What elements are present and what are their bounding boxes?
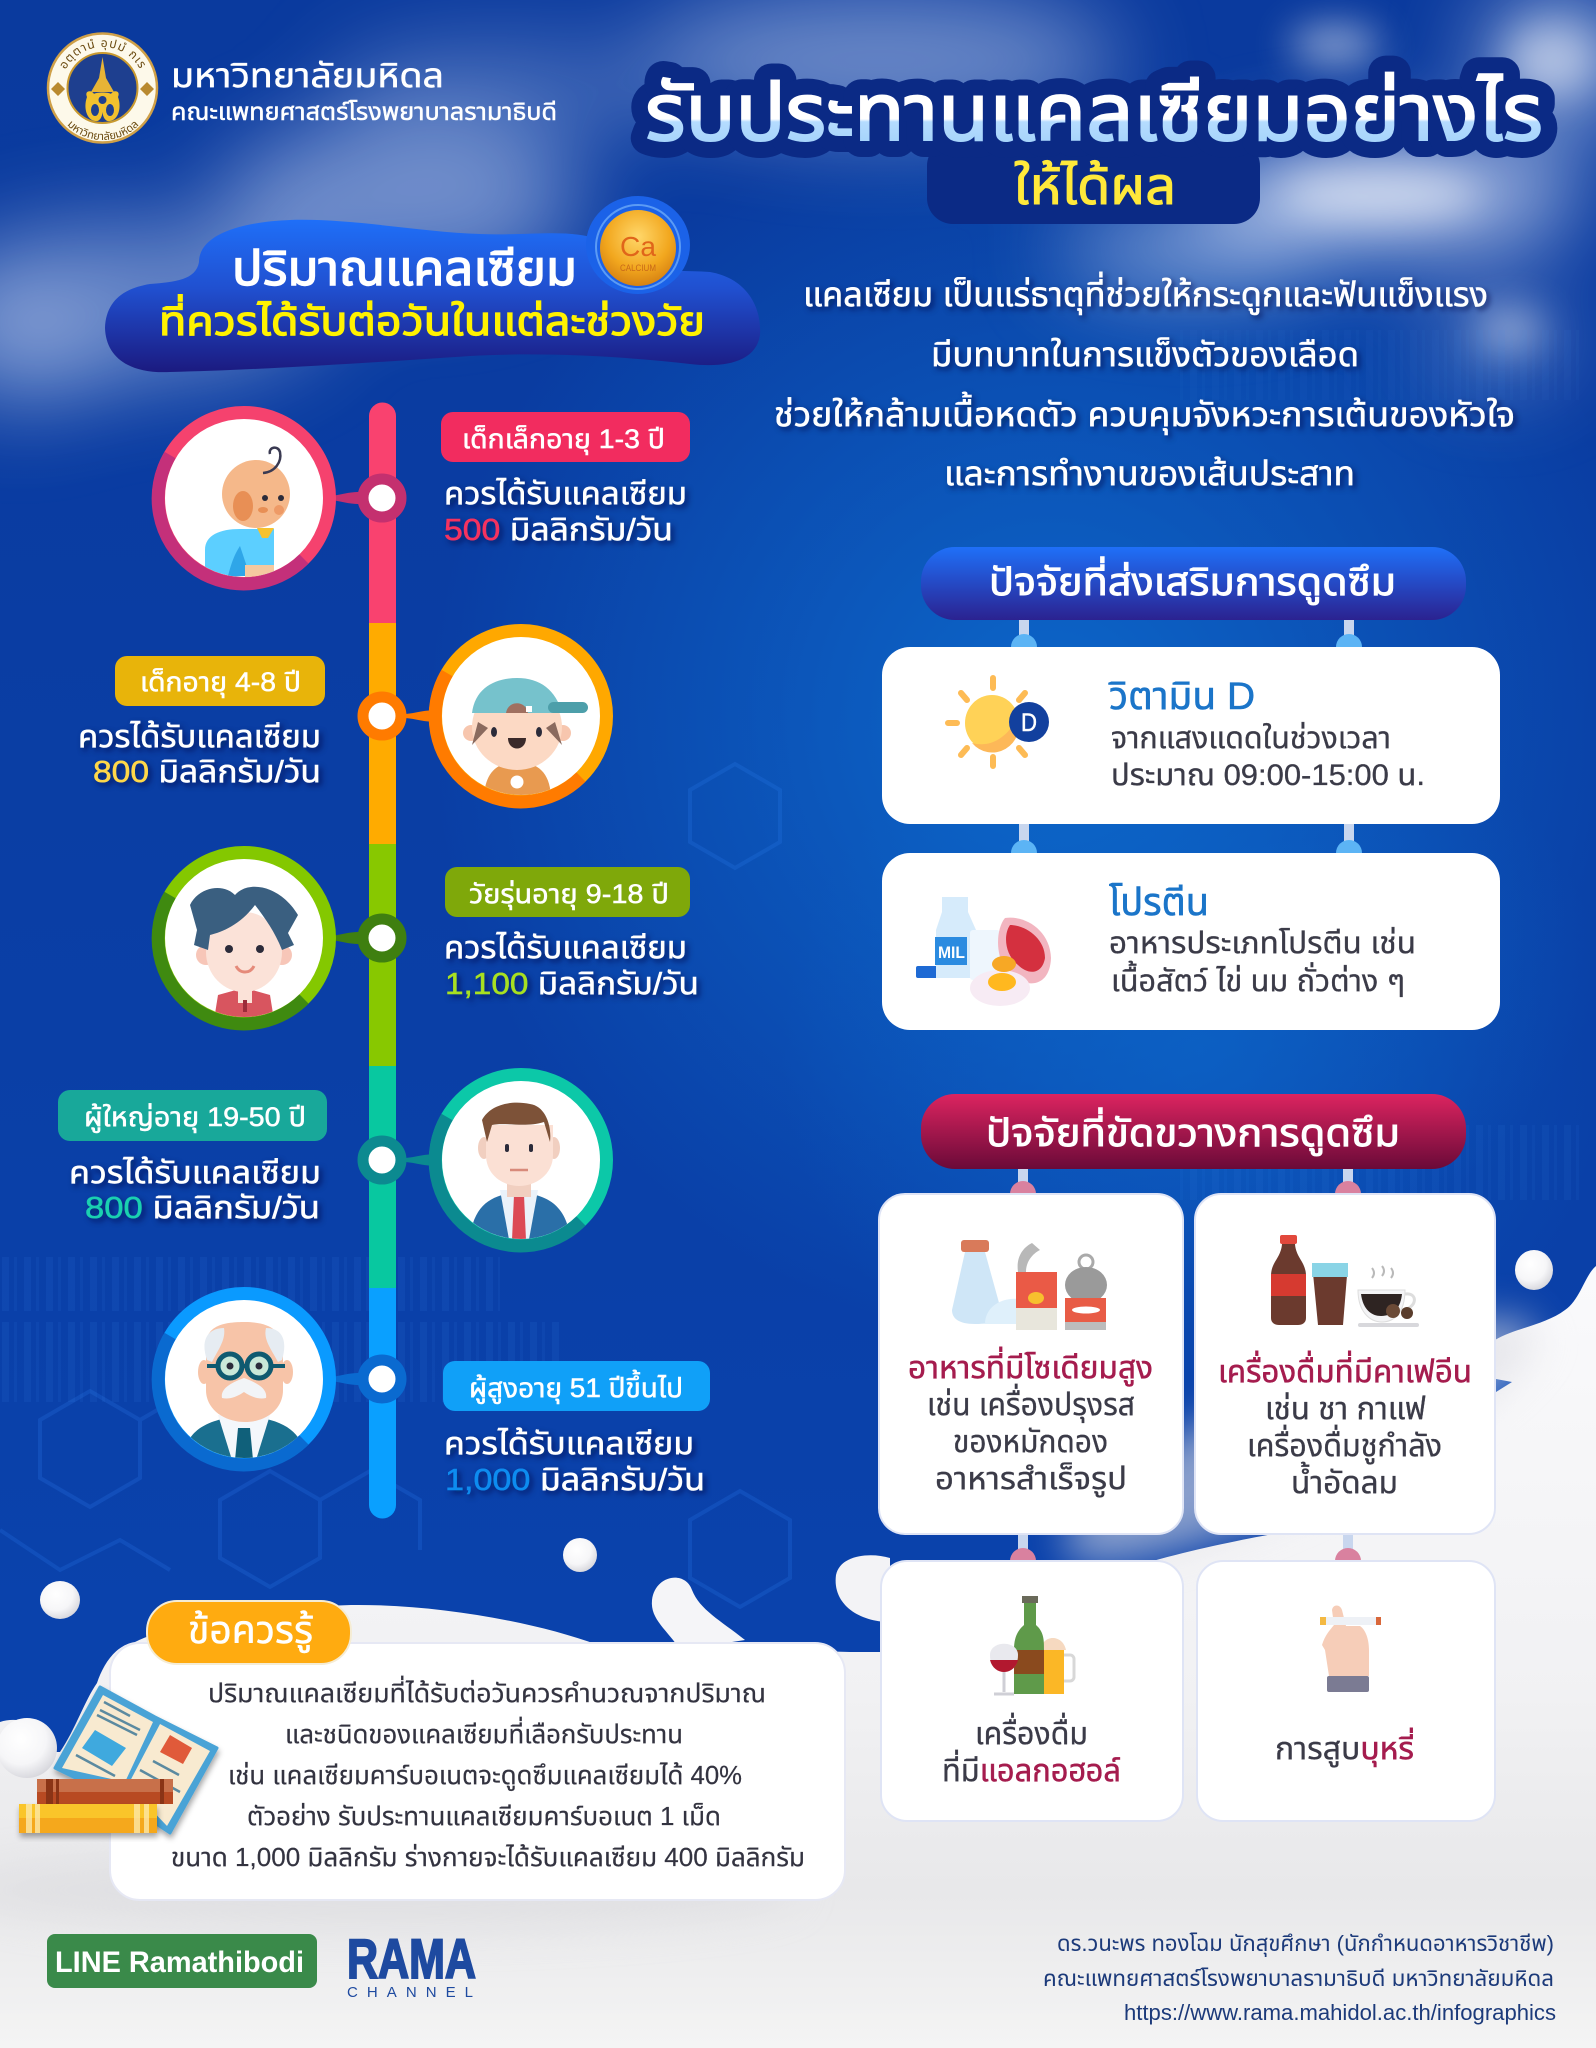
logo: RAMA Channel: CHANNEL (347, 1984, 473, 2001)
intro paragraph: แคลเซียม เป็นแร่ธาตุที่ช่วยให้กระดูกและฟันแข็งแรง (803, 271, 1488, 315)
logo: RAMA Channel (347, 1927, 476, 2001)
intro paragraph: มีบทบาทในการแข็งตัวของเลือด (931, 336, 1359, 374)
timeline entry: children 4-8 (78, 630, 606, 802)
card: high sodium food: อาหารสำเร็จรูป (935, 1461, 1127, 1497)
university logo: อตฺตานํ อุปมํ กเร (60, 38, 145, 68)
age label (115, 656, 325, 706)
heading cloud: calcium amount by age (105, 196, 760, 372)
card: protein: โปรตีน (1109, 882, 1209, 924)
badge: LINE Ramathibodi (47, 1934, 317, 1988)
subtitle pill (927, 140, 1260, 224)
card: smoking (1197, 1561, 1495, 1821)
heading: absorption inhibitors: ปัจจัยที่ขัดขวางการดูดซึม (986, 1107, 1400, 1156)
calcium amount: 500 มิลลิกรัม/วัน (444, 512, 673, 547)
calcium amount: 800 มิลลิกรัม/วัน (93, 754, 321, 789)
heading: absorption boosters (921, 547, 1466, 620)
card: protein: เนื้อสัตว์ ไข่ นม ถั่วต่าง ๆ (1111, 960, 1405, 998)
card: vitamin D (882, 647, 1500, 824)
calcium amount: ควรได้รับแคลเซียม (444, 930, 687, 965)
connectors: inhibitors (1010, 1169, 1361, 1561)
card: high sodium food: ของหมักดอง (953, 1424, 1108, 1459)
university name: คณะแพทยศาสตร์โรงพยาบาลรามาธิบดี (171, 99, 557, 126)
calcium amount (444, 1426, 705, 1497)
card: alcohol: เครื่องดื่ม (975, 1712, 1088, 1751)
card: caffeinated drinks: เช่น ชา กาแฟ (1265, 1391, 1426, 1426)
age label: เด็กเล็กอายุ 1-3 ปี (462, 424, 665, 455)
heading cloud: calcium amount by age: ปริมาณแคลเซียม (232, 243, 577, 296)
card: alcohol (881, 1561, 1183, 1821)
age label (58, 1090, 327, 1141)
university name: มหาวิทยาลัยมหิดล (171, 57, 444, 95)
calcium amount: ควรได้รับแคลเซียม (69, 1155, 321, 1190)
icon: calcium capsule (586, 196, 690, 294)
card: smoking: การสูบบุหรี่ (1275, 1727, 1414, 1767)
card: vitamin D: วิตามิน D (1108, 676, 1255, 718)
calcium amount (444, 476, 687, 547)
card: caffeinated drinks: น้ำอัดลม (1291, 1461, 1398, 1500)
panel: good to know: ขนาด 1,000 มิลลิกรัม ร่างกายจะได้รับแคลเซียม 400 มิลลิกรัม (171, 1842, 805, 1872)
panel: good to know: และชนิดของแคลเซียมที่เลือกรับประทาน (285, 1716, 683, 1749)
intro paragraph: ช่วยให้กล้ามเนื้อหดตัว ควบคุมจังหวะการเต้นของหัวใจ (774, 391, 1515, 435)
timeline entry: teens 9-18 (158, 852, 699, 1024)
card: caffeinated drinks (1195, 1194, 1495, 1534)
main title: รับประทานแคลเซียมอย่างไร (645, 68, 1543, 157)
icon: calcium capsule: CALCIUM (620, 263, 656, 273)
badge: LINE Ramathibodi: LINE Ramathibodi (55, 1946, 304, 1979)
connectors: boosters (1011, 620, 1362, 853)
icon: sun with D badge (948, 678, 1049, 766)
avatar: boy with cap (435, 630, 606, 802)
avatar: teenager (158, 852, 330, 1024)
university logo: มหาวิทยาลัยมหิดล (68, 121, 138, 140)
age label (441, 412, 690, 462)
card: caffeinated drinks: เครื่องดื่มชูกำลัง (1247, 1424, 1442, 1464)
card: high sodium food: เช่น เครื่องปรุงรส (927, 1383, 1135, 1423)
icon: milk, meat and egg (916, 897, 1051, 1006)
icon: salt and canned food (952, 1240, 1107, 1330)
card: caffeinated drinks: เครื่องดื่มที่มีคาเฟอีน (1218, 1350, 1472, 1389)
card: alcohol: ที่มีแอลกอฮอล์ (942, 1749, 1121, 1788)
card: vitamin D: ประมาณ 09:00-15:00 น. (1111, 759, 1425, 792)
heading: absorption inhibitors (921, 1094, 1466, 1169)
calcium amount (69, 1155, 321, 1225)
calcium amount: ควรได้รับแคลเซียม (444, 1426, 694, 1461)
icon: hand with cigarette (1320, 1606, 1381, 1692)
icon: milk, meat and egg: MIL (938, 943, 965, 962)
timeline entry: adults 19-50 (58, 1074, 606, 1246)
intro paragraph (774, 271, 1515, 493)
calcium amount: 800 มิลลิกรัม/วัน (85, 1190, 320, 1225)
badge: good to know: ข้อควรรู้ (188, 1610, 313, 1653)
panel: good to know: ตัวอย่าง รับประทานแคลเซียมคาร์บอเนต 1 เม็ด (247, 1801, 721, 1831)
panel: good to know: ปริมาณแคลเซียมที่ได้รับต่อวันควรคำนวณจากปริมาณ (208, 1675, 766, 1708)
icon: wine, bottle and beer (990, 1596, 1074, 1694)
calcium amount: ควรได้รับแคลเซียม (444, 476, 687, 511)
age label (443, 1361, 710, 1411)
card: high sodium food: อาหารที่มีโซเดียมสูง (908, 1346, 1153, 1386)
heading: absorption boosters: ปัจจัยที่ส่งเสริมการดูดซึม (989, 556, 1396, 605)
age label: วัยรุ่นอายุ 9-18 ปี (469, 879, 669, 910)
panel: good to know (19, 1601, 845, 1900)
milk droplets (40, 1250, 1553, 1619)
card: protein: อาหารประเภทโปรตีน เช่น (1109, 927, 1416, 960)
icon: sun with D badge: D (1021, 709, 1037, 737)
credits: https://www.rama.mahidol.ac.th/infographics (1124, 2000, 1556, 2025)
card: protein (882, 853, 1500, 1030)
calcium amount (444, 930, 699, 1001)
timeline entry: toddlers 1-3 (158, 412, 690, 584)
age label (445, 867, 690, 917)
timeline entry: elderly 51+ (158, 1294, 710, 1497)
icon: cola, iced drink and coffee (1271, 1235, 1419, 1327)
panel: good to know: เช่น แคลเซียมคาร์บอเนตจะดูดซึมแคลเซียมได้ 40% (228, 1760, 742, 1791)
age label: ผู้สูงอายุ 51 ปีขึ้นไป (469, 1369, 683, 1404)
calcium amount: 1,000 มิลลิกรัม/วัน (445, 1462, 705, 1497)
credits: ดร.วนะพร ทองโฉม นักสุขศึกษา (นักกำหนดอาหารวิชาชีพ) (1057, 1931, 1554, 1957)
main title: รับประทานแคลเซียมอย่างไร (645, 68, 1543, 157)
calcium amount (78, 719, 321, 789)
calcium amount: 1,100 มิลลิกรัม/วัน (445, 966, 699, 1001)
card: vitamin D: จากแสงแดดในช่วงเวลา (1111, 722, 1391, 755)
timeline bar (369, 402, 396, 1518)
badge: good to know (147, 1601, 351, 1664)
credits (1043, 1931, 1556, 2025)
avatar: baby (158, 412, 330, 584)
icon: calcium capsule: Ca (620, 231, 656, 262)
logo: RAMA Channel: RAMA (347, 1927, 476, 1990)
heading cloud: calcium amount by age: ที่ควรได้รับต่อวันในแต่ละช่วงวัย (159, 294, 705, 344)
university name (171, 57, 557, 126)
avatar: adult man (435, 1074, 606, 1246)
icon: books (19, 1687, 217, 1833)
university logo (46, 32, 158, 144)
subtitle pill: ให้ได้ผล (1014, 158, 1176, 216)
calcium amount: ควรได้รับแคลเซียม (78, 719, 321, 754)
age label: เด็กอายุ 4-8 ปี (140, 667, 301, 698)
avatar: elderly man (158, 1294, 330, 1465)
intro paragraph: และการทำงานของเส้นประสาท (944, 455, 1355, 493)
credits: คณะแพทยศาสตร์โรงพยาบาลรามาธิบดี มหาวิทยาลัยมหิดล (1043, 1966, 1554, 1991)
card: high sodium food (879, 1194, 1183, 1534)
age label: ผู้ใหญ่อายุ 19-50 ปี (84, 1102, 306, 1133)
